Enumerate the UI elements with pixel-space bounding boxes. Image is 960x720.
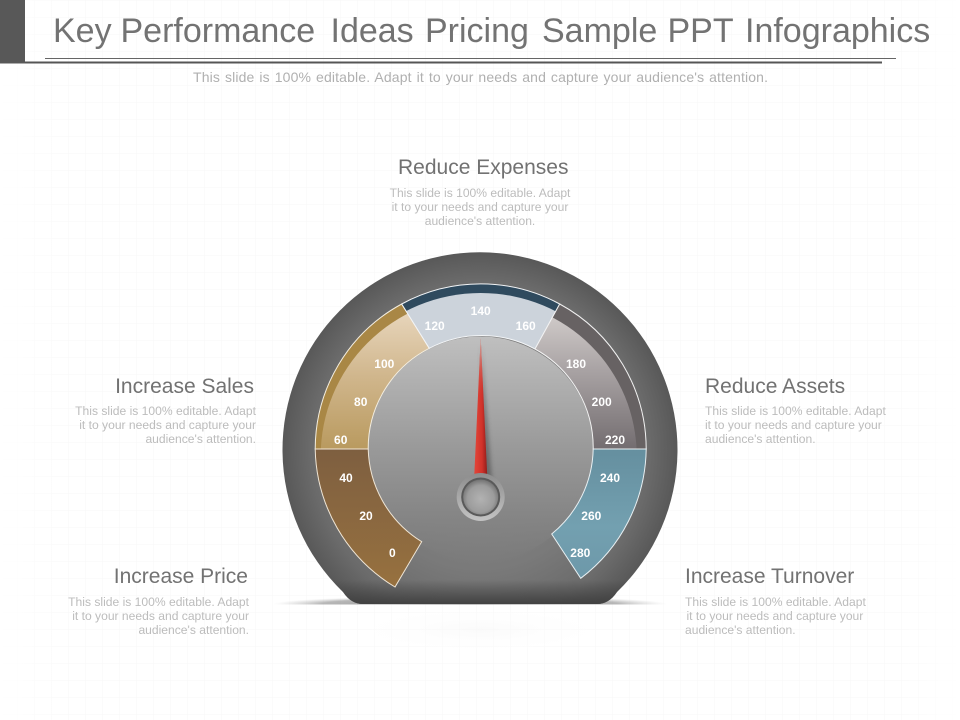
text block: Increase Sales: This slide is 100% editable. Adapt <box>75 404 257 418</box>
text block: Increase Price: audience's attention. <box>138 623 249 637</box>
title: Pricing <box>425 12 529 50</box>
gauge floor shadow <box>282 598 658 604</box>
text block: Reduce Expenses: Reduce Expenses <box>398 156 568 179</box>
gauge numbers: 260 <box>581 509 602 523</box>
text block: Increase Turnover: Increase Turnover <box>685 565 854 588</box>
gauge numbers: 20 <box>359 509 373 523</box>
text block: Reduce Assets: audience's attention. <box>705 432 816 446</box>
subtitle: This slide is 100% editable. Adapt it to your needs and capture your audience's attention. <box>193 69 768 85</box>
title: PPT <box>668 12 733 50</box>
gauge numbers: 280 <box>570 546 591 560</box>
text block: Reduce Expenses: it to your needs and capture your <box>392 200 568 214</box>
text block: Reduce Assets: Reduce Assets <box>705 375 845 398</box>
gauge numbers: 60 <box>334 433 348 447</box>
gauge numbers: 140 <box>471 304 491 318</box>
title: Key <box>53 12 112 50</box>
gauge numbers: 240 <box>600 471 620 485</box>
text block: Reduce Expenses <box>390 156 571 228</box>
gauge numbers: 0 <box>389 546 396 560</box>
gauge numbers: 80 <box>354 395 368 409</box>
gauge numbers: 180 <box>566 357 586 371</box>
gauge numbers: 220 <box>605 433 625 447</box>
text block: Reduce Expenses: This slide is 100% editable. Adapt <box>390 186 571 200</box>
segment: 240 to 280 blue <box>552 449 646 578</box>
text block: Reduce Expenses: audience's attention. <box>425 214 535 228</box>
gauge numbers <box>334 304 625 560</box>
dial face <box>368 336 593 562</box>
text block: Increase Turnover: audience's attention. <box>685 623 796 637</box>
text block: Increase Turnover <box>685 565 866 637</box>
text block: Increase Price <box>68 565 250 637</box>
title: Sample <box>542 12 657 50</box>
text block: Reduce Assets: it to your needs and capture your <box>705 418 882 432</box>
segment: 60 to 100 tan <box>314 303 430 450</box>
gauge numbers: 160 <box>516 319 536 333</box>
text block: Increase Sales: audience's attention. <box>145 432 256 446</box>
text block: Increase Sales: it to your needs and capture your <box>79 418 256 432</box>
text block: Increase Sales <box>75 375 257 446</box>
text block: Reduce Assets: This slide is 100% editable. Adapt <box>705 404 886 418</box>
gauge <box>282 252 678 604</box>
gauge numbers: 120 <box>425 319 445 333</box>
text block: Increase Price: Increase Price <box>114 565 248 588</box>
text block: Increase Turnover: it to your needs and capture your <box>686 609 863 623</box>
text block: Increase Turnover: This slide is 100% editable. Adapt <box>685 595 866 609</box>
gauge body <box>282 252 678 605</box>
gauge numbers: 40 <box>339 471 353 485</box>
needle hub <box>457 473 505 521</box>
gauge numbers: 100 <box>374 357 395 371</box>
title: Infographics <box>745 12 930 50</box>
title: Ideas <box>330 12 414 50</box>
segment: 120 to 160 blue grey <box>401 283 560 350</box>
segment: 0 to 40 brown <box>315 449 422 587</box>
segment: 180 to 220 grey <box>534 303 647 450</box>
gauge numbers: 200 <box>592 395 612 409</box>
text block: Reduce Assets <box>705 375 886 446</box>
text block: Increase Price: it to your needs and capture your <box>72 609 249 623</box>
text block: Increase Sales: Increase Sales <box>115 375 254 398</box>
title: Performance <box>120 12 315 50</box>
needle <box>474 338 492 481</box>
text block: Increase Price: This slide is 100% editable. Adapt <box>68 595 250 609</box>
header block <box>0 0 896 64</box>
